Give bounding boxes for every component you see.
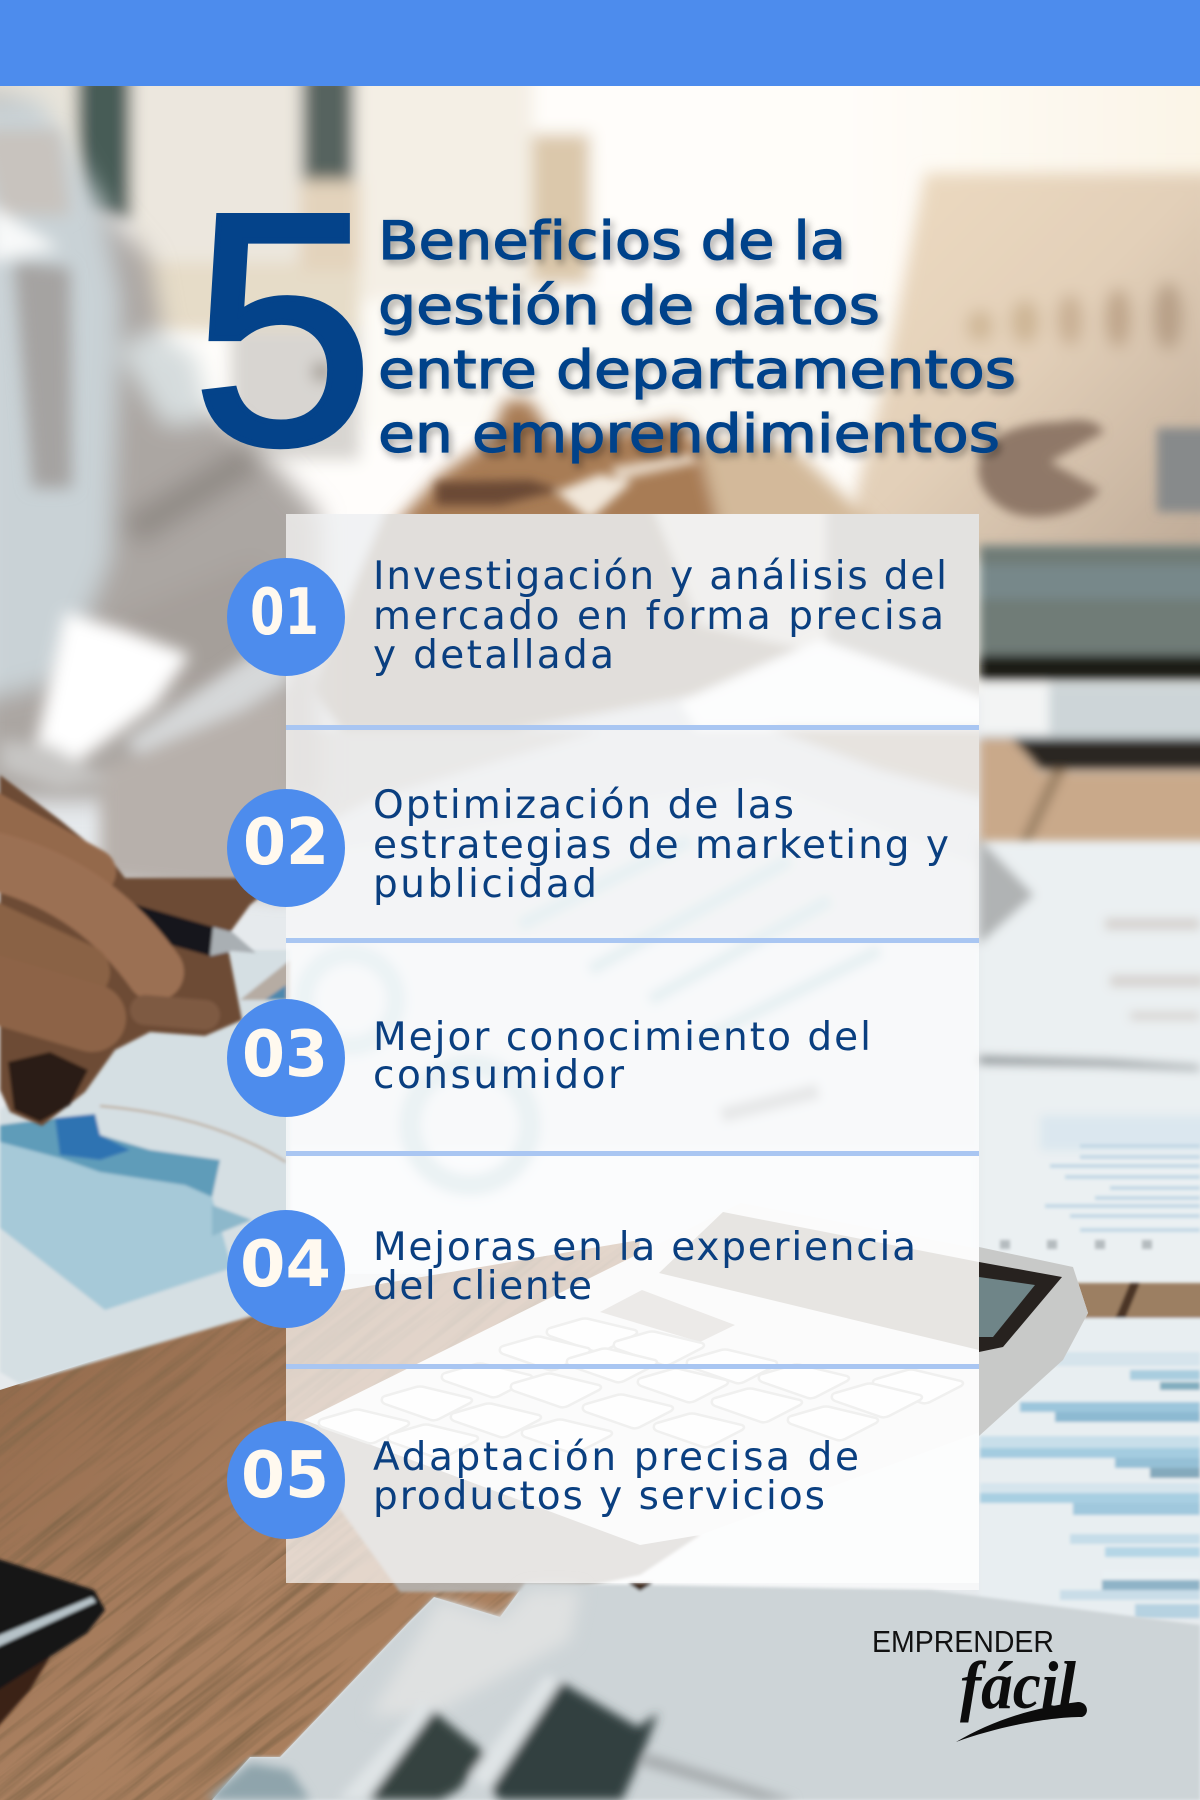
title text: entre departamentos <box>378 340 1016 401</box>
item 02: estrategias de marketing y <box>373 823 949 868</box>
binder paper and clips, lower right <box>212 1583 1200 1800</box>
big number 5: 5 <box>192 145 374 513</box>
logo: Emprender Fácil: EMPRENDER <box>872 1624 1054 1659</box>
item 02: Optimización de las <box>373 783 794 828</box>
translucent list panel <box>227 514 979 1583</box>
title text: gestión de datos <box>378 276 880 337</box>
item 04: del cliente <box>373 1264 592 1309</box>
hand silhouette <box>0 775 268 1126</box>
pen <box>130 903 256 956</box>
item 01: mercado en forma precisa <box>373 594 944 639</box>
item 05 <box>227 1421 859 1539</box>
title block <box>192 145 1016 513</box>
logo: Emprender Fácil <box>872 1624 1087 1742</box>
item 02: publicidad <box>373 862 597 907</box>
item 02 <box>227 783 949 907</box>
item 03: Mejor conocimiento del <box>373 1015 871 1060</box>
item 01: y detallada <box>373 633 614 678</box>
title text: Beneficios de la <box>378 211 846 272</box>
item 05: Adaptación precisa de <box>373 1435 859 1480</box>
item 05: productos y servicios <box>373 1474 825 1519</box>
top blue banner <box>0 0 1200 86</box>
paper at lower right of panel <box>545 1400 979 1590</box>
under-panel paper and chart <box>298 514 979 1192</box>
phone <box>0 1558 105 1730</box>
item 03: 03 <box>242 1018 328 1092</box>
title text <box>378 211 1016 465</box>
blurred laptop with charts <box>840 173 1200 555</box>
item 04: Mejoras en la experiencia <box>373 1225 916 1270</box>
shirt and sleeve <box>0 90 320 800</box>
item 04: 04 <box>240 1228 331 1302</box>
item 01: 01 <box>250 576 319 650</box>
logo: Emprender Fácil: fácil <box>960 1647 1076 1723</box>
item 03: consumidor <box>373 1053 625 1098</box>
wood grain <box>0 1256 548 1800</box>
hands above the panel <box>390 400 880 530</box>
paper with chart at left <box>0 950 290 1384</box>
item 05: 05 <box>241 1439 329 1513</box>
title text: en emprendimientos <box>378 404 1000 465</box>
item 03 <box>227 999 871 1117</box>
item 04 <box>227 1210 916 1328</box>
wood table <box>0 1240 640 1800</box>
blurred paper at right <box>979 838 1200 1292</box>
item 01: Investigación y análisis del <box>373 554 947 599</box>
calculator <box>290 1203 1088 1592</box>
hand with pen <box>0 775 268 1126</box>
fingers <box>0 810 205 1018</box>
item 02: 02 <box>243 806 329 880</box>
blurred window and wall <box>0 70 1200 690</box>
item 01 <box>227 554 947 678</box>
